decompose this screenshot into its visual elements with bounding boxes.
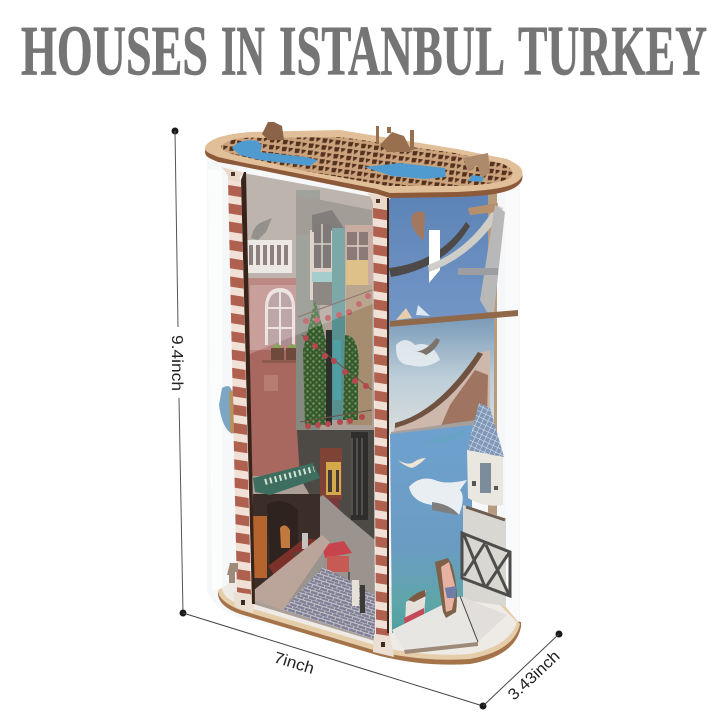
dimension: width: 7inch [272,650,316,678]
title: IN [221,12,265,90]
curved road [389,222,470,277]
pink floor strip [254,535,330,610]
left face: street scene [240,170,380,650]
pink house wall [248,278,300,476]
bridge arc [428,205,503,272]
right face: Bosphorus scene [388,190,518,654]
middle pillar [367,193,394,657]
painted city [392,350,490,438]
couple on street [352,580,359,606]
wave layer [424,428,467,443]
couple figure [435,558,457,618]
landmark: mosque [376,126,414,152]
cloud cut-out [409,479,467,515]
bunting strings [298,290,372,422]
balcony figure [251,218,272,240]
seagull [398,458,426,468]
lower sea wall [390,425,472,633]
cat on sign [404,590,426,627]
food cart [322,541,352,581]
dark railing [462,533,510,596]
cobblestones [283,567,376,640]
acrylic sleeve [207,160,520,664]
balcony [245,240,292,273]
dimension: height: 9.4inch [168,335,185,391]
upper blue wall [388,190,492,328]
dimension: height [168,128,185,613]
sky with clouds [388,318,494,435]
title: HOUSES [21,12,208,90]
title: ISTANBUL [279,12,505,90]
dimension: width [180,610,483,706]
top plate: city map [205,122,522,198]
landmark: bridge [463,153,490,178]
arched window [265,288,295,345]
small figure at left base [227,563,238,583]
title [21,12,707,90]
window icon on left outer wall [219,386,234,434]
floor [392,596,478,650]
wooden medallion [411,211,425,240]
landmark: tower left [262,122,284,140]
left pillar [221,167,255,613]
lower alley [297,430,375,540]
water [232,140,318,166]
teal tall building [296,190,320,430]
ivy [303,300,327,425]
base plate [218,575,521,665]
upper glass wash [240,170,375,358]
shelf [390,310,518,327]
tower [467,403,504,506]
flower boxes [262,344,296,391]
green awning [253,463,320,495]
white lower wall [463,505,506,606]
strip behind [488,192,497,600]
cafe front [253,494,320,590]
dimension: depth: 3.43inch [505,648,564,704]
dimension: depth [480,630,564,710]
bird on string [415,338,440,355]
paving [288,495,375,640]
